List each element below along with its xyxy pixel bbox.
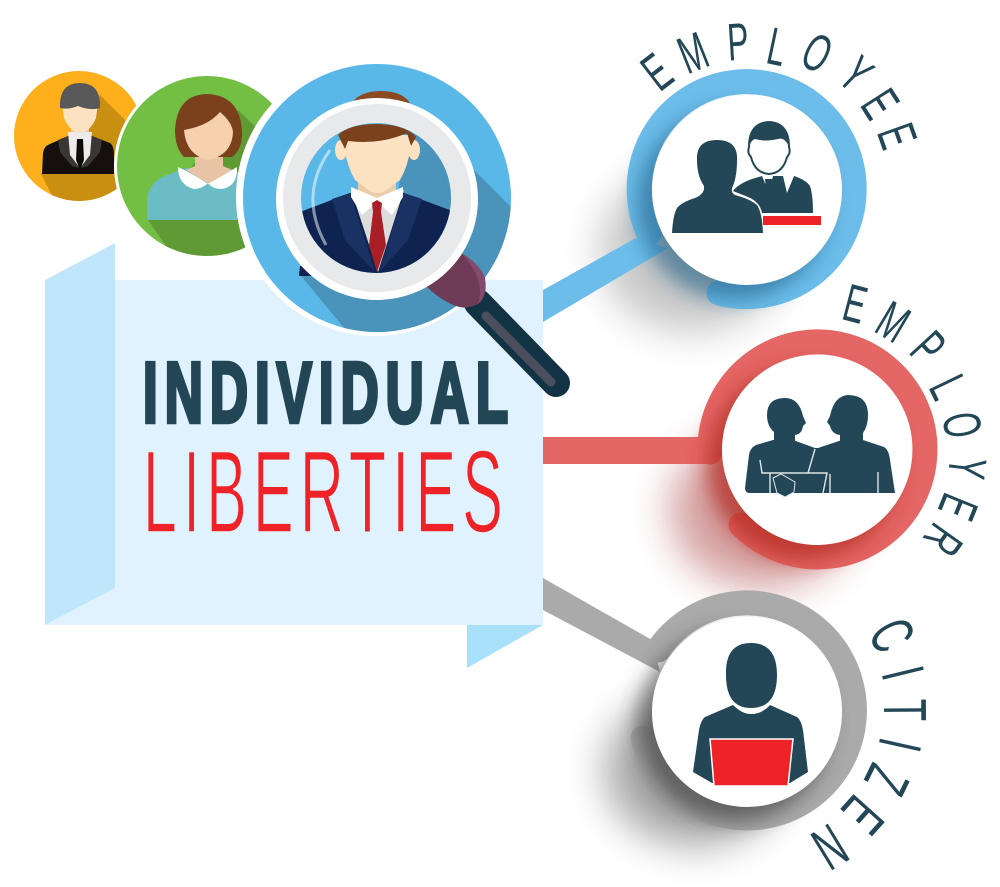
label: EMPLOYER: Y bbox=[936, 454, 997, 482]
green long shadow bbox=[148, 110, 255, 256]
magnifier blue disc bbox=[243, 64, 511, 332]
icon: employer handshake bbox=[745, 395, 895, 497]
label: EMPLOYER: L bbox=[917, 366, 978, 408]
woman collar bbox=[178, 167, 237, 189]
right person head bbox=[827, 395, 868, 442]
handle grip bbox=[478, 303, 556, 383]
red bar bbox=[763, 216, 821, 225]
employee soft shadow bbox=[600, 168, 784, 332]
label: EMPLOYEE: Y bbox=[828, 45, 884, 103]
label: CITIZEN: N bbox=[801, 811, 859, 884]
front person bbox=[672, 140, 763, 233]
back person tie bbox=[765, 179, 773, 196]
label: EMPLOYER: E bbox=[926, 486, 989, 528]
label: EMPLOYEE: E bbox=[849, 79, 910, 129]
ribbon left flap bbox=[45, 243, 115, 625]
label: EMPLOYER: O bbox=[930, 408, 993, 442]
back person suit bbox=[733, 176, 813, 213]
man shirt bbox=[351, 190, 404, 272]
employer soft shadow bbox=[670, 432, 854, 588]
label: EMPLOYER: M bbox=[866, 290, 919, 355]
label: CITIZEN: C bbox=[855, 607, 929, 663]
employer disc bbox=[722, 355, 912, 545]
magnifier long shadow bbox=[298, 170, 511, 332]
man face bbox=[62, 103, 98, 133]
man lapels bbox=[58, 136, 102, 168]
hair behind lens bbox=[352, 91, 410, 103]
employee inner shadow bbox=[637, 108, 829, 300]
label: CITIZEN: I bbox=[868, 660, 938, 686]
man hair bbox=[338, 124, 416, 149]
magnifier backing edge bbox=[236, 58, 514, 336]
man face bbox=[345, 135, 410, 193]
title: LIBERTIES: LIBERTIES bbox=[143, 427, 509, 557]
label: CITIZEN: Z bbox=[851, 755, 923, 805]
magnifier bbox=[236, 58, 556, 383]
handle highlight bbox=[462, 254, 486, 304]
orange long shadow bbox=[41, 95, 126, 201]
orange disc bbox=[14, 71, 144, 201]
label: CITIZEN: E bbox=[829, 783, 897, 847]
man hair bbox=[60, 83, 100, 109]
label: EMPLOYEE: L bbox=[762, 17, 792, 78]
back person hair bbox=[749, 122, 789, 147]
man suit bbox=[302, 193, 450, 273]
handle collar bbox=[426, 252, 485, 308]
ribbon main face bbox=[45, 280, 543, 625]
red laptop bbox=[710, 739, 793, 786]
label: CITIZEN: I bbox=[865, 733, 935, 757]
label: EMPLOYER bbox=[837, 273, 997, 566]
glass highlight bbox=[313, 150, 330, 245]
woman neck bbox=[186, 150, 232, 184]
label: EMPLOYEE: E bbox=[631, 42, 684, 102]
label: CITIZEN: T bbox=[871, 699, 940, 721]
employer connector and ring bbox=[543, 342, 925, 557]
woman face bbox=[184, 112, 233, 160]
joined bodies bbox=[745, 440, 895, 493]
employee connector bbox=[543, 238, 668, 322]
employer inner shadow bbox=[707, 368, 899, 560]
man neck bbox=[358, 182, 396, 198]
citizen inner shadow bbox=[637, 630, 829, 822]
citizen disc bbox=[652, 617, 842, 807]
back person head bbox=[748, 122, 790, 174]
avatar: green woman bbox=[114, 76, 272, 256]
navy shard behind lens bbox=[299, 266, 315, 276]
man right ear bbox=[408, 140, 420, 160]
citizen soft shadow bbox=[605, 694, 785, 846]
man shirt bbox=[68, 132, 92, 168]
woman dress bbox=[147, 168, 250, 220]
white arm outlines bbox=[760, 449, 878, 493]
handle stripe bbox=[486, 316, 551, 382]
employer connector bbox=[543, 437, 714, 464]
employee ring bbox=[639, 82, 854, 297]
green disc bbox=[117, 76, 297, 256]
lens interior with man bbox=[301, 123, 451, 273]
label: EMPLOYEE: E bbox=[865, 116, 928, 156]
citizen connector bbox=[543, 578, 660, 672]
lens sky bbox=[300, 120, 455, 275]
man tie bbox=[369, 200, 386, 272]
handshake bbox=[773, 474, 795, 497]
title: INDIVIDUAL: INDIVIDUAL bbox=[143, 345, 515, 440]
man collar bbox=[351, 187, 403, 215]
man tie bbox=[76, 139, 84, 170]
icon: employee pair bbox=[672, 122, 821, 233]
lens white rim bbox=[276, 98, 478, 300]
ribbon panel bbox=[45, 243, 543, 668]
label: CITIZEN bbox=[801, 607, 940, 884]
citizen ring bbox=[643, 603, 854, 818]
label: EMPLOYER: R bbox=[912, 513, 974, 566]
label: EMPLOYEE: O bbox=[792, 21, 841, 85]
citizen head bbox=[726, 643, 777, 708]
employee connector and ring bbox=[543, 82, 854, 322]
label: EMPLOYEE: P bbox=[726, 12, 750, 73]
citizen body bbox=[693, 705, 808, 783]
woman hair bbox=[175, 94, 242, 157]
label: EMPLOYEE: M bbox=[670, 21, 716, 86]
icon: citizen with laptop bbox=[693, 643, 808, 786]
green disc with white edge bbox=[114, 73, 300, 259]
left person head bbox=[767, 398, 806, 442]
lens grey ring bbox=[283, 104, 471, 292]
employee disc bbox=[652, 95, 842, 285]
man lapels bbox=[332, 193, 422, 272]
employer ring bbox=[710, 342, 925, 557]
lens shadow bbox=[398, 130, 451, 224]
man suit bbox=[42, 136, 114, 174]
man neck bbox=[71, 125, 89, 143]
avatar: orange man bbox=[14, 71, 136, 201]
label: EMPLOYEE bbox=[631, 12, 928, 156]
ribbon right fold bbox=[467, 620, 543, 668]
man left ear bbox=[335, 140, 347, 160]
label: EMPLOYER: E bbox=[837, 273, 873, 336]
citizen connector and ring bbox=[543, 578, 854, 818]
label: EMPLOYER: P bbox=[899, 320, 957, 376]
